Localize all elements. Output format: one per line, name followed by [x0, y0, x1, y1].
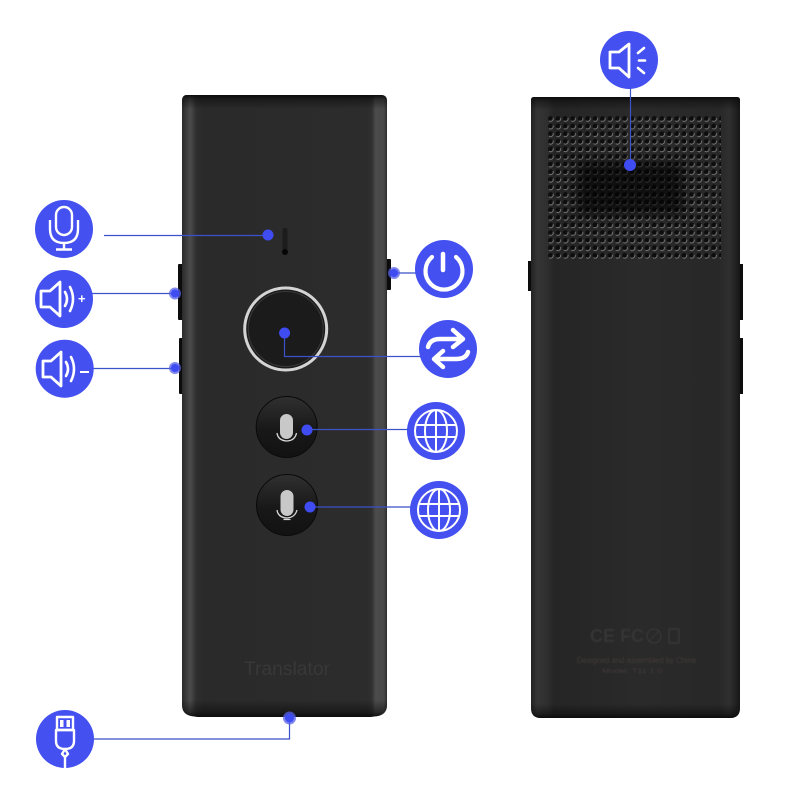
power side button — [386, 259, 391, 290]
front top edge shade — [182, 95, 387, 109]
certification marks: CE FC — [590, 626, 644, 646]
front bottom edge shade — [182, 700, 387, 717]
marker dot — [624, 159, 636, 171]
callout: volume down — [36, 340, 181, 398]
icon: speaker — [600, 31, 658, 89]
icon: speaker plus: + — [78, 291, 86, 306]
connector line — [630, 88, 632, 165]
icon: globe — [410, 481, 468, 539]
marker dot — [169, 362, 181, 374]
icon: power — [415, 240, 473, 298]
icon: speaker plus — [35, 270, 93, 328]
callout: language one — [302, 402, 465, 460]
icon: globe — [407, 402, 465, 460]
language button two — [256, 474, 318, 536]
back top edge shade — [531, 97, 740, 110]
marker dot — [302, 424, 312, 436]
language button one — [256, 396, 317, 458]
connector line — [92, 718, 290, 739]
volume up side button — [178, 264, 183, 320]
connector line — [307, 428, 410, 430]
manufacturer text: Designed and assembled by China — [577, 656, 697, 665]
connector line — [90, 292, 175, 294]
brand text: Translator — [244, 659, 331, 680]
back device — [528, 97, 743, 718]
back bottom edge shade — [531, 704, 740, 718]
connector line — [104, 234, 268, 236]
icon: speaker minus — [36, 340, 94, 398]
manufacturer text: Model: T11 1.0 — [602, 668, 663, 675]
connector line — [90, 368, 175, 370]
icon: swap arrows — [419, 320, 477, 378]
manufacturer text — [577, 656, 697, 675]
callout: translate button — [279, 320, 477, 378]
back right side buttons — [739, 264, 743, 394]
microphone slot — [282, 228, 288, 255]
marker dot — [283, 712, 296, 724]
icon: USB plug — [36, 710, 94, 768]
back body — [531, 97, 740, 718]
callout: power — [388, 240, 473, 298]
marker dot — [279, 328, 290, 338]
connector line — [310, 506, 414, 508]
front body — [182, 95, 387, 717]
callout: microphone — [35, 200, 274, 258]
marker dot — [169, 288, 181, 300]
connector line — [394, 272, 420, 274]
back left side button — [528, 261, 532, 291]
callout: USB port — [36, 710, 296, 768]
icon: microphone — [35, 200, 93, 258]
connector line — [284, 333, 422, 356]
volume down side button — [179, 338, 183, 394]
front device — [178, 95, 391, 717]
callout: volume up — [35, 270, 181, 328]
callout: language two — [304, 481, 468, 539]
recycling mark — [647, 629, 679, 643]
callout: speaker — [600, 31, 658, 171]
marker dot — [388, 267, 400, 279]
marker dot — [304, 502, 316, 512]
speaker grille — [547, 115, 721, 259]
marker dot — [262, 230, 274, 240]
main translate button — [245, 288, 327, 370]
